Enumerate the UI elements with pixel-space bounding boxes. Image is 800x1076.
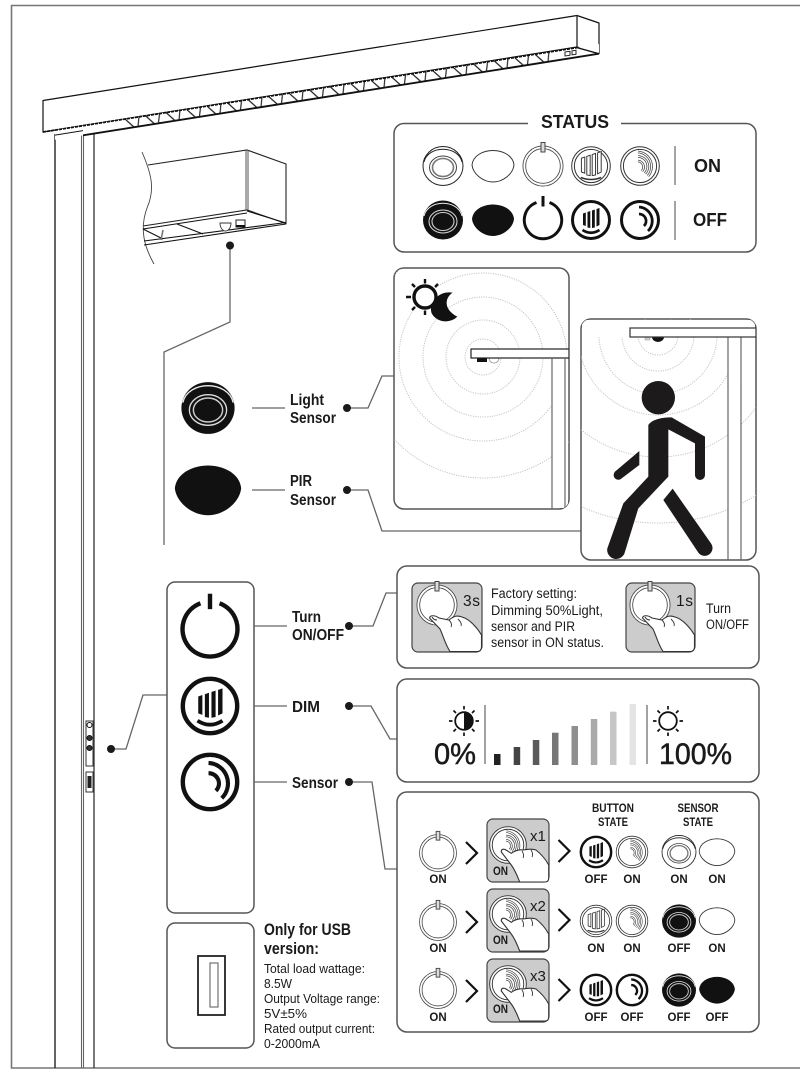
text: factory setting: Dimming 50%Light, bbox=[491, 603, 603, 618]
row: one press: ON bbox=[670, 874, 688, 886]
label: light sensor: Light bbox=[290, 392, 324, 409]
text: USB version specification: Only for USB bbox=[264, 920, 351, 939]
row: three presses: OFF bbox=[584, 1012, 608, 1024]
heading: sensor state: STATE bbox=[683, 817, 713, 829]
text: turn on/off bbox=[706, 601, 749, 632]
panel: status bbox=[394, 112, 756, 252]
text: USB version specification: version: bbox=[264, 939, 319, 958]
text: USB version specification: 0-2000mA bbox=[264, 1036, 320, 1051]
icon: press 1 second bbox=[626, 582, 695, 652]
connector: sensor to sensor panel bbox=[345, 778, 397, 869]
icon: power button bbox=[183, 594, 237, 657]
label: turn on/off: Turn bbox=[292, 609, 321, 626]
row: one press: ON bbox=[493, 866, 508, 878]
row: three presses bbox=[421, 959, 735, 1024]
label: sensor bbox=[254, 775, 338, 792]
connector: light sensor to day panel bbox=[343, 376, 394, 412]
text: USB version specification bbox=[264, 920, 380, 1051]
heading: button state bbox=[592, 803, 634, 829]
connector: dim to dim panel bbox=[345, 702, 397, 739]
heading: sensor state bbox=[678, 803, 719, 829]
row: one press: x1 bbox=[530, 828, 546, 845]
text: USB version specification: Rated output current: bbox=[264, 1021, 375, 1036]
text: factory setting bbox=[491, 586, 604, 650]
label: PIR sensor: PIR bbox=[290, 473, 312, 490]
row: two presses: OFF bbox=[668, 943, 690, 955]
text: 0 percent: 0% bbox=[434, 738, 476, 771]
row: one press: OFF bbox=[584, 874, 608, 886]
label: dim: DIM bbox=[292, 699, 320, 716]
row: two presses: ON bbox=[708, 943, 726, 955]
connector: turn to factory panel bbox=[345, 593, 397, 630]
status heading: STATUS bbox=[541, 112, 609, 132]
status row: off: OFF bbox=[693, 210, 727, 230]
status row: on: ON bbox=[694, 156, 721, 176]
detail: fixture end with sensors bbox=[142, 150, 286, 264]
row: three presses: ON bbox=[493, 1004, 508, 1016]
status row: on bbox=[423, 142, 721, 186]
text: USB version specification: Output Voltage range: bbox=[264, 991, 380, 1006]
heading: button state: BUTTON bbox=[592, 803, 634, 815]
label: PIR sensor: Sensor bbox=[290, 492, 336, 509]
row: three presses: OFF bbox=[706, 1012, 728, 1024]
row: three presses: OFF bbox=[620, 1012, 644, 1024]
icon: dim button bbox=[183, 679, 237, 733]
panel: control buttons bbox=[167, 582, 254, 913]
row: three presses: x3 bbox=[530, 968, 546, 985]
panel: dimming scale bbox=[397, 679, 759, 782]
icon: full sun bbox=[653, 706, 683, 736]
row: three presses: OFF bbox=[668, 1012, 690, 1024]
row: one press: ON bbox=[623, 874, 641, 886]
text: turn on/off: Turn bbox=[706, 601, 731, 616]
text: USB version specification: Total load wattage: bbox=[264, 961, 365, 976]
text: turn on/off: ON/OFF bbox=[706, 617, 749, 632]
connector: detail to sensors bbox=[164, 242, 234, 545]
text: USB version specification: 8.5W bbox=[264, 976, 293, 991]
icon: walking person bbox=[607, 381, 713, 559]
icon: press 3 seconds bbox=[412, 582, 482, 652]
icon: PIR sensor large bbox=[175, 466, 241, 515]
row: two presses: ON bbox=[587, 943, 605, 955]
label: PIR sensor bbox=[252, 473, 336, 509]
heading: sensor state: SENSOR bbox=[678, 803, 719, 815]
text: factory setting: sensor in ON status. bbox=[491, 635, 604, 650]
row: two presses: x2 bbox=[530, 898, 546, 915]
status row: off bbox=[423, 196, 727, 240]
label: light sensor bbox=[252, 392, 336, 427]
row: three presses: ON bbox=[429, 1012, 447, 1024]
panel: factory setting and on/off bbox=[397, 566, 759, 668]
icon: press 1 second: 1s bbox=[676, 593, 693, 610]
text: factory setting: sensor and PIR bbox=[491, 619, 575, 634]
bar chart: dimming levels bbox=[494, 704, 636, 765]
linear ceiling light bbox=[43, 16, 599, 142]
label: dim bbox=[254, 699, 320, 716]
text: USB version specification: 5V±5% bbox=[264, 1006, 307, 1021]
connector: pole controls to control panel bbox=[107, 695, 167, 753]
icon: half sun bbox=[449, 706, 479, 736]
panel: USB port bbox=[167, 923, 254, 1048]
icon: press 3 seconds: 3s bbox=[463, 593, 480, 610]
row: two presses: ON bbox=[623, 943, 641, 955]
text: 100 percent: 100% bbox=[659, 738, 732, 771]
text: factory setting: Factory setting: bbox=[491, 586, 577, 601]
icon: light sensor large bbox=[181, 382, 235, 434]
label: sensor: Sensor bbox=[292, 775, 338, 792]
heading: button state: STATE bbox=[598, 817, 628, 829]
panel: sensor button sequence bbox=[397, 792, 759, 1032]
label: turn on/off: ON/OFF bbox=[292, 627, 344, 644]
row: one press: ON bbox=[708, 874, 726, 886]
panel: PIR sensor range bbox=[580, 318, 757, 561]
row: two presses: ON bbox=[493, 935, 508, 947]
icon: sun and moon bbox=[406, 279, 457, 321]
row: one press bbox=[421, 819, 735, 886]
label: turn on/off bbox=[254, 609, 344, 644]
label: light sensor: Sensor bbox=[290, 410, 336, 427]
icon: sensor button bbox=[183, 755, 237, 809]
pole-mounted control plate bbox=[86, 721, 93, 792]
wall pole bbox=[55, 128, 94, 1068]
panel: light sensor range bbox=[393, 267, 570, 510]
row: two presses bbox=[421, 889, 735, 955]
row: two presses: ON bbox=[429, 943, 447, 955]
connector: PIR to walking panel bbox=[343, 486, 581, 531]
row: one press: ON bbox=[429, 874, 447, 886]
